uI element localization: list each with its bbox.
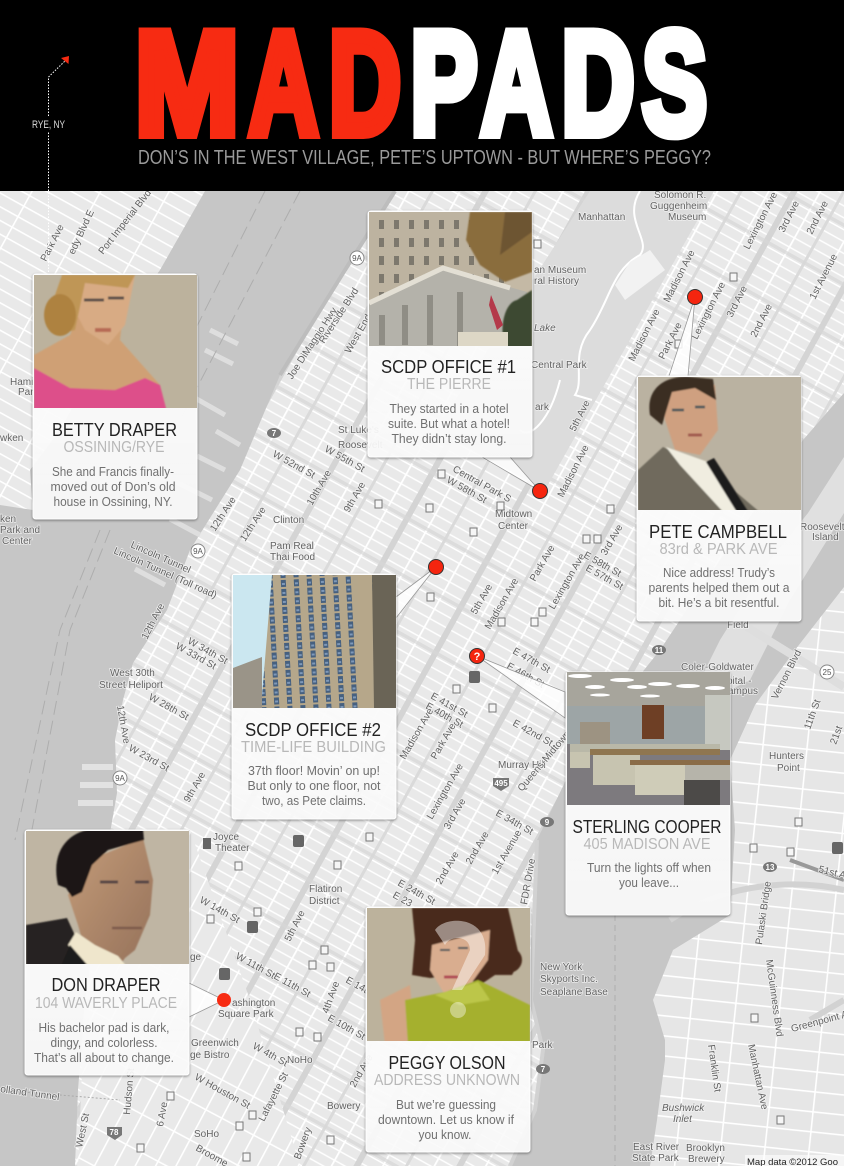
card: SCDP Office 1: suite. But what a hotel! [388,417,510,431]
map labels: 6 Ave [155,1101,170,1128]
map labels: Seaplane Base [540,987,608,998]
card: Sterling Cooper [566,672,730,915]
card: Pete Campbell: PETE CAMPBELL [649,522,787,542]
map labels: Vernon Blvd [770,648,804,701]
photo: Don Draper [26,829,189,968]
card: Peggy Olson [366,907,530,1152]
map labels: Roosevelt [800,522,844,533]
pin: SCDP office 2 [428,560,444,574]
map route shields and transit icons: 9A [352,254,363,263]
map labels: Roosevelt [338,440,383,451]
map labels: W 11th St [234,951,277,982]
map labels: Park Ave [657,320,685,361]
pin: Don Draper [217,993,231,1007]
map labels: E 34th St [494,808,535,838]
map labels: Madison Ave [398,706,436,762]
card: Betty Draper: She and Francis finally- [52,465,174,479]
map labels: Center [2,536,33,547]
card: Pete Campbell: Nice address! Trudy’s [663,566,775,580]
map labels: 4th Ave [320,980,342,1015]
card: Sterling Cooper: Turn the lights off when [587,861,711,875]
map labels: Central Park S [451,464,513,505]
card: Don Draper: That’s all about to change. [34,1051,174,1065]
photo: Time-Life Building [233,575,396,708]
map labels: Lincoln Tunnel (Toll road) [112,546,218,601]
map labels: 2nd Ave [348,1052,376,1090]
map labels: 5th Ave [568,398,593,433]
map labels: W 33rd St [174,641,218,672]
map labels: Solomon R. [654,190,706,201]
map labels: W 52nd St [271,449,317,481]
map labels: Center [498,521,529,532]
map labels: Madison Ave [627,307,663,363]
map labels: Murray Hill [498,760,546,771]
card: Sterling Cooper: 405 MADISON AVE [584,836,710,853]
map labels: Theater [215,843,250,854]
map labels: 3rd Ave [599,522,626,558]
map labels: Park [532,1040,554,1051]
card: Betty Draper: BETTY DRAPER [52,420,177,440]
map labels: 1st Avenue [808,252,840,301]
map labels: SoHo [194,1129,219,1140]
map route shields and transit icons: 11 [655,646,664,655]
card: Peggy Olson: PEGGY OLSON [388,1053,506,1073]
map labels: 12th Ave [208,495,239,534]
card: SCDP Office 1: They started in a hotel [390,402,508,416]
card: Don Draper [25,829,189,1075]
map labels: West 30th [110,668,155,679]
map labels: Lincoln Tunnel [129,540,192,576]
map route shields and transit icons [107,240,843,1161]
map labels: W 4th St [251,1041,290,1069]
card: SCDP Office 1 [368,211,532,457]
card: Don Draper: His bachelor pad is dark, [38,1021,170,1035]
photo: Betty Draper [34,275,197,412]
title: MAD PADS: D [562,2,634,164]
card: Betty Draper: house in Ossining, NY. [54,495,172,509]
map labels: FDR Drive [519,857,538,906]
map labels: Manhattan [578,212,625,223]
map labels: Field [727,620,749,631]
map labels: Flatiron [309,884,342,895]
map labels: 12th Ave [114,705,132,745]
map labels: Lexington Ave [742,190,780,251]
map labels: ken [0,514,16,525]
map labels: Queens-Midtown [516,729,573,794]
card: Peggy Olson: downtown. Let us know if [378,1113,515,1127]
map labels: Bushwick [662,1103,705,1114]
map labels: ge Bistro [190,1050,230,1061]
map labels: District [309,896,340,907]
card: Peggy Olson: ADDRESS UNKNOWN [374,1072,520,1089]
map route shields and transit icons: 25 [823,668,832,677]
map labels: spital - [722,676,751,687]
subtitle: DON’S IN THE WEST VILLAGE, PETE’S UPTOWN - BUT WHERE’S PEGGY? [138,147,711,169]
photo: The Pierre hotel [369,212,532,360]
map labels: Bowery [327,1101,360,1112]
card: Don Draper: DON DRAPER [52,975,160,995]
card: SCDP Office 2: TIME-LIFE BUILDING [241,739,386,756]
map labels: Hunters [769,751,804,762]
map labels: 2nd Ave [464,829,492,866]
map labels: E 14th [344,975,374,999]
map route shields and transit icons: 9 [545,818,550,827]
map labels: Island [812,532,839,543]
title: MAD PADS: P [410,2,478,164]
map labels: W 58th St [445,475,488,506]
map labels: ge [190,952,202,963]
card: SCDP Office 2: But only to one floor, not [248,779,381,793]
map labels: 1st Avenue [490,828,524,876]
map labels: Central Park [531,360,588,371]
title: MAD PADS: A [249,2,318,164]
map labels: olland Tunnel [0,1084,60,1103]
card: SCDP Office 2: 37th floor! Movin’ on up! [248,764,380,778]
map labels: 3rd Ave [725,284,750,319]
map labels: E 11th St [272,971,312,1000]
title: MAD PADS: S [642,2,707,164]
card: Peggy Olson: you know. [418,1128,472,1142]
map labels: Hudson St [122,1068,137,1115]
map labels: Bowery [292,1126,314,1161]
map route shields and transit icons: 9A [193,547,204,556]
map labels: Lake [534,323,556,334]
map labels: Pulaski Bridge [754,880,774,945]
map labels: E 41st St [429,691,470,720]
label: Rye, NY: RYE, NY [32,119,65,131]
map labels: 3rd Ave [777,199,802,234]
map route shields and transit icons: 7 [541,1065,546,1074]
map labels: E 24th St [396,878,437,908]
map labels: State Park [632,1153,680,1164]
map route shields and transit icons: 78 [110,1128,119,1137]
card: Betty Draper: moved out of Don’s old [50,480,176,494]
map labels: E 42nd St [511,718,554,749]
title: MAD PADS: A [481,2,552,164]
map labels: Brooklyn [686,1143,725,1154]
map labels: 3rd Ave [442,796,469,832]
map labels: W 28th St [147,692,190,723]
map labels: E 47th St [511,646,552,676]
map labels: W Houston St [193,1072,252,1112]
header band [0,0,844,191]
map route shields and transit icons: 495 [494,779,508,788]
photo: Peggy Olson [367,908,530,1045]
pin: Sterling Cooper question mark: ? [474,651,481,663]
map labels: Lafayette St [257,1071,291,1123]
map labels: E 58th St [582,550,623,580]
card: SCDP Office 1: SCDP OFFICE #1 [381,357,516,377]
pin: SCDP office 1 [532,484,548,498]
title: MAD PADS [135,2,707,164]
card: Sterling Cooper: you leave... [619,876,679,890]
map labels: ark [535,402,550,413]
map labels: Park Ave [528,543,558,584]
map labels: Park Ave [39,222,67,263]
map labels: Street Heliport [99,680,163,691]
map labels: Coler-Goldwater [681,662,754,673]
card: Sterling Cooper: STERLING COOPER [572,817,722,837]
card: Betty Draper [33,274,197,519]
map labels: Par [18,387,34,398]
title: MAD PADS: D [329,2,401,164]
map labels: 10th Ave [305,468,334,508]
map labels: Madison Ave [556,443,592,499]
map labels: Joe DiMaggio Hwy [285,306,340,382]
map labels: 12th Ave [140,601,167,641]
map labels: 5th Ave [283,908,308,943]
map labels: 9th Ave [182,770,208,804]
card: Pete Campbell: bit. He’s a bit resentful. [658,596,780,610]
map labels: W 55th St [323,444,366,475]
map labels: ampus [728,686,758,697]
card: SCDP Office 2: two, as Pete claims. [262,794,366,808]
map labels: Greenwich [191,1038,239,1049]
card: Pete Campbell: parents helped them out a [648,581,790,595]
callout pointers [189,297,695,1017]
card: Pete Campbell [637,376,801,621]
map labels: wken [0,433,23,444]
map labels: Franklin St [705,1044,723,1093]
card: SCDP Office 2 [232,574,396,819]
map labels: West End [343,313,374,356]
map labels: West St [74,1112,92,1149]
map labels: 2nd Ave [805,199,831,236]
card: SCDP Office 2: SCDP OFFICE #2 [245,720,381,740]
map route shields and transit icons: 9A [115,774,126,783]
map labels: Port Imperial Blvd [97,188,154,257]
card: Don Draper: 104 WAVERLY PLACE [35,995,177,1012]
map labels: edy Blvd E [67,208,97,256]
map labels: Madison Ave [662,248,698,304]
dotted route to Rye [48,56,69,272]
map labels: 9th Ave [342,480,368,514]
map labels: Midtown [495,509,532,520]
map labels: E 57th St [584,563,625,593]
map labels: Pam Real [270,541,314,552]
map labels: ashington [232,998,275,1009]
map labels: East River [633,1142,680,1153]
map route shields and transit icons: 13 [766,863,775,872]
map labels: Inlet [673,1114,693,1125]
photo: Pete Campbell [638,377,801,514]
card: Betty Draper: OSSINING/RYE [64,439,164,456]
map labels: an Museum [534,265,586,276]
map labels: Museum [668,212,706,223]
map labels: ral History [534,276,579,287]
map labels: Lexington Ave [425,761,466,822]
map labels: Brewery [688,1154,725,1165]
photo: Sterling Cooper office [567,672,730,805]
map labels: Lexington Ave [547,551,588,612]
pin: Pete Campbell [688,290,702,304]
map labels: 2nd Ave [434,849,462,886]
map labels: Joyce [213,832,240,843]
title: MAD PADS: M [135,2,239,164]
map labels: W 23rd St [127,743,171,774]
map labels: Thai Food [270,552,315,563]
pin: Sterling Cooper question mark [470,648,484,664]
map labels: Guggenheim [650,201,707,212]
map labels: 11th St [802,698,823,731]
card: Don Draper: dingy, and colorless. [50,1036,158,1050]
map labels: 12th Ave [238,505,269,544]
map labels: Point [777,763,800,774]
card: SCDP Office 1: THE PIERRE [407,376,491,393]
map route shields and transit icons: 7 [272,429,277,438]
map labels: Clinton [273,515,304,526]
map labels: Park Ave [429,721,459,762]
map labels: St Luke's [338,425,379,436]
map labels: 2nd Ave [749,302,775,339]
map labels: NoHo [287,1055,313,1066]
map labels: 5th Ave [469,582,495,616]
map labels: Park and [0,525,40,536]
map labels: Hami [10,377,33,388]
card: SCDP Office 1: They didn’t stay long. [392,432,506,446]
map labels: Lexington Ave [690,280,728,341]
map labels: W 14th St [198,895,241,926]
card: Pete Campbell: 83rd & PARK AVE [660,541,778,558]
map labels: E 46th St [505,661,546,691]
map labels: Madison Ave [483,576,521,632]
card: Peggy Olson: But we’re guessing [396,1098,496,1112]
map labels: E 23 [391,890,414,910]
map labels: Skyports Inc. [540,974,598,985]
map labels: E 10th St [326,1013,367,1043]
map labels: New York [540,962,583,973]
map labels: McGuinness Blvd [763,959,785,1037]
map labels: Square Park [218,1009,275,1020]
map labels: W 34th St [186,636,229,667]
map labels: E 40th St [424,701,465,731]
map labels: Riverside Blvd [317,286,361,346]
map labels: Manhattan Ave [745,1043,770,1111]
